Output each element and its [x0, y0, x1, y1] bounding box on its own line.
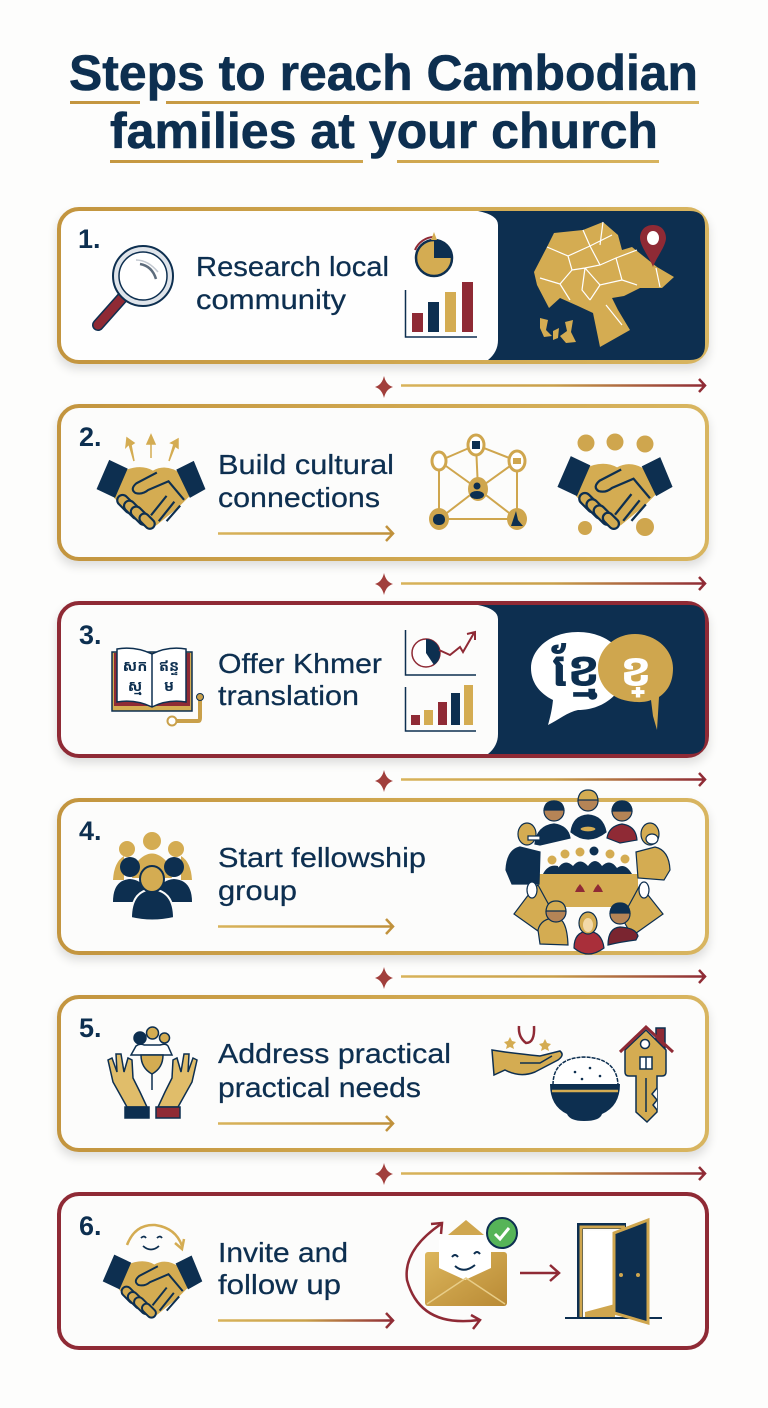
text: invite: Invite and — [218, 1237, 348, 1268]
text: needs: Address practical — [218, 1038, 451, 1069]
map pin — [640, 225, 666, 267]
icon: rice bowl — [550, 1057, 620, 1121]
arrow — [218, 526, 393, 541]
text: fellowship — [218, 842, 426, 906]
line and pie chart — [406, 630, 476, 675]
text: offer — [218, 648, 382, 711]
step number: 4. — [79, 816, 102, 846]
panel: step 5 — [57, 997, 709, 1157]
connector arrow 1 — [375, 376, 705, 398]
arrow — [218, 1116, 393, 1131]
icon: Khmer book: ស្ម — [128, 678, 142, 695]
text: research — [196, 251, 389, 315]
icon: group — [113, 832, 192, 920]
connector arrow 5 — [375, 1163, 705, 1185]
navy panel with map — [478, 211, 705, 360]
text: research: Research local — [196, 251, 389, 282]
panel: step 2 — [57, 406, 709, 566]
pie chart — [415, 232, 452, 276]
text: fellowship: Start fellowship — [218, 842, 426, 873]
illustration: people around table — [506, 790, 670, 954]
text: offer: Offer Khmer — [218, 648, 382, 679]
icon: handshake with smile — [103, 1225, 202, 1319]
text: build: Build cultural — [218, 449, 394, 480]
connector arrow 2 — [375, 573, 705, 595]
step number: 5. — [79, 1013, 102, 1043]
text: invite — [218, 1237, 348, 1300]
icon: Khmer book — [112, 648, 204, 726]
icon: envelope with check and arrows — [407, 1218, 517, 1329]
step number: 1. — [78, 224, 101, 254]
title — [69, 45, 699, 162]
panel: step 4 — [57, 790, 709, 960]
step number: 2. — [79, 422, 102, 452]
icon: Khmer book: ឥន្ទ — [159, 658, 179, 675]
icon: Khmer book: សក — [123, 658, 147, 675]
navy panel with speech bubbles — [478, 605, 705, 754]
text: fellowship: group — [218, 875, 297, 906]
icon: Khmer book: ម — [164, 678, 174, 695]
arrow — [218, 919, 393, 934]
panel: step 3 — [57, 603, 709, 763]
text: build — [218, 449, 394, 513]
title: families at your church — [110, 103, 658, 159]
connector arrow 3 — [375, 770, 705, 792]
icon: handshake with dots — [557, 434, 673, 536]
arrow to door — [520, 1265, 559, 1281]
text: build: connections — [218, 482, 380, 513]
icon: open hands — [108, 1027, 197, 1118]
title: Steps to reach Cambodian — [69, 45, 698, 101]
text: offer: translation — [218, 680, 359, 711]
connector arrow 4 — [375, 967, 705, 989]
bar chart — [406, 282, 477, 337]
panel: step 1 — [57, 209, 709, 369]
icon: giving hand — [492, 1026, 562, 1075]
icon: house key — [620, 1027, 673, 1122]
panel: step 6 — [59, 1194, 707, 1348]
text: needs: practical needs — [218, 1072, 421, 1103]
step number: 3. — [79, 620, 102, 650]
icon: network — [429, 435, 527, 530]
step number: 6. — [79, 1211, 102, 1241]
text: needs — [218, 1038, 451, 1103]
icon: open door — [565, 1220, 662, 1323]
navy panel with speech bubbles: ខ្មែ — [551, 641, 601, 700]
icon: magnifying glass — [98, 246, 173, 325]
text: research: community — [196, 284, 346, 315]
arrow — [218, 1313, 393, 1328]
navy panel with speech bubbles: ខ្ — [620, 644, 652, 698]
icon: handshake with arrows — [97, 435, 205, 531]
bar chart — [406, 685, 476, 731]
text: invite: follow up — [218, 1269, 341, 1300]
